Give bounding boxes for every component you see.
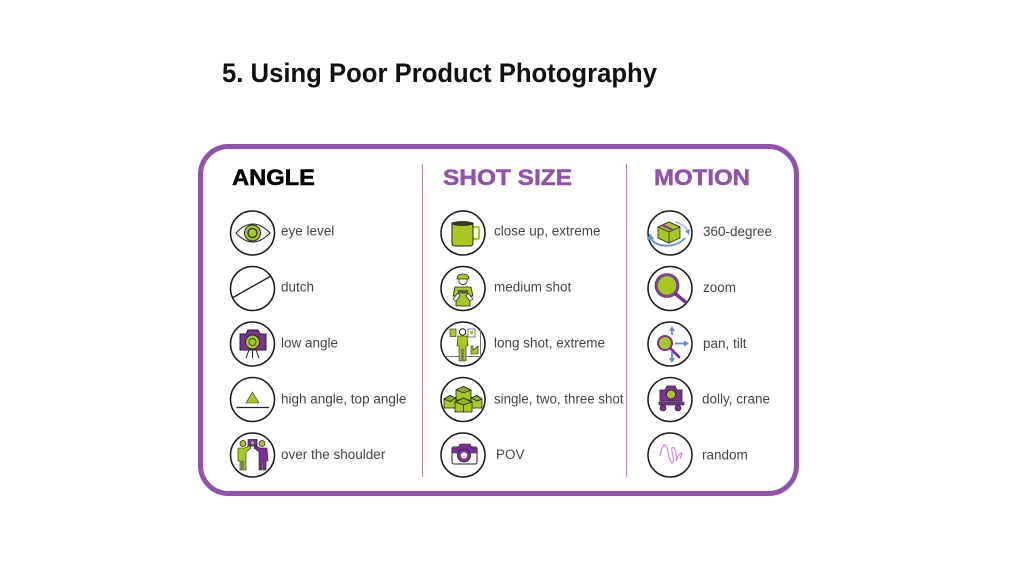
icon: random scribble bbox=[648, 433, 692, 477]
icon: zoom bbox=[648, 266, 692, 310]
column: motion bbox=[647, 165, 772, 477]
column: shot size bbox=[441, 165, 624, 477]
label: pan tilt: pan, tilt bbox=[703, 336, 747, 351]
label: medium shot: medium shot bbox=[494, 280, 572, 294]
label: eye level: eye level bbox=[281, 224, 334, 238]
icon: boxes bbox=[441, 378, 485, 422]
icon: dolly crane bbox=[648, 378, 692, 422]
icon: high angle bbox=[230, 378, 274, 422]
cube: front bbox=[455, 398, 472, 412]
label: close up: close up, extreme bbox=[494, 224, 601, 238]
column: angle bbox=[230, 165, 406, 477]
icon: dutch bbox=[230, 266, 274, 310]
label: 360-degree: 360-degree bbox=[703, 224, 772, 239]
label: long shot: long shot, extreme bbox=[494, 336, 605, 350]
icon: 360-degree box bbox=[647, 211, 692, 255]
label: random: random bbox=[702, 448, 748, 462]
label: over the shoulder: over the shoulder bbox=[281, 447, 386, 462]
label: low angle: low angle bbox=[281, 336, 338, 350]
label: dolly crane: dolly, crane bbox=[702, 392, 770, 406]
icon: over the shoulder bbox=[230, 433, 274, 477]
cube: right bbox=[471, 396, 482, 408]
label: dutch: dutch bbox=[281, 280, 314, 294]
icon: low angle camera bbox=[230, 322, 274, 366]
heading: motion: MOTION bbox=[654, 165, 750, 190]
cube: left bbox=[444, 396, 456, 408]
icon: eye level bbox=[230, 211, 274, 255]
label: POV: POV bbox=[496, 447, 525, 462]
label: zoom: zoom bbox=[703, 280, 736, 295]
label: high angle: high angle, top angle bbox=[281, 392, 406, 406]
heading: angle: ANGLE bbox=[232, 165, 315, 190]
panel: rounded purple frame bbox=[200, 146, 796, 494]
cube: top bbox=[456, 386, 471, 400]
heading: shot size: SHOT SIZE bbox=[443, 165, 572, 190]
title: 5. Using Poor Product Photography bbox=[222, 58, 657, 88]
label: boxes: single, two, three shot bbox=[494, 392, 624, 406]
icon: medium shot bbox=[441, 266, 485, 310]
icon: pan tilt bbox=[648, 322, 692, 366]
icon: long shot bbox=[441, 322, 485, 366]
icon: POV camera bbox=[441, 433, 485, 477]
icon: mug close up bbox=[441, 211, 485, 255]
